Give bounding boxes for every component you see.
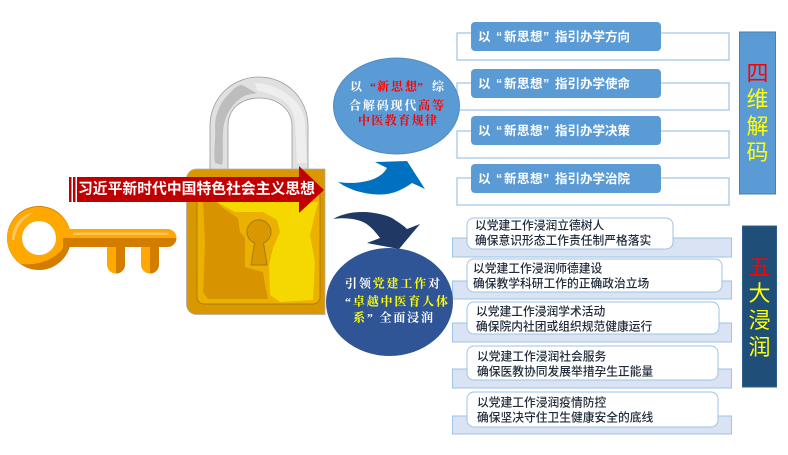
panel: five infusion items: [452, 218, 732, 434]
item: 办学方向: [457, 22, 729, 60]
item: 师德建设: 以党建工作浸润师德建设: [473, 262, 602, 276]
item: 办学治院: 以“新思想”指引办学治院: [478, 171, 630, 186]
item: 师德建设: [452, 259, 732, 299]
lower ellipse text line 1: 引领党建工作对: [345, 276, 440, 290]
item: 立德树人: 确保意识形态工作责任制严格落实: [475, 234, 651, 248]
arrow: navy swoosh down: [333, 212, 420, 249]
item: 办学治院: [457, 164, 729, 205]
lower ellipse text line 3: 系” 全面浸润: [353, 310, 433, 324]
panel: 五大浸润 side label: 浸: [748, 308, 771, 333]
panel: 五大浸润 side label: 润: [748, 335, 771, 360]
item: 立德树人: 以党建工作浸润立德树人: [475, 218, 604, 232]
lower ellipse text line 2: “卓越中医育人体: [345, 294, 448, 308]
item: 学术活动: [452, 302, 732, 342]
item: 办学使命: [457, 69, 729, 110]
arrow: red banner with title: [69, 166, 324, 213]
panel: 五大浸润 side label: 大: [748, 281, 771, 306]
panel: 四维解码 side label: 维: [746, 87, 769, 112]
item: 疫情防控: [452, 392, 732, 434]
padlock shackle: [210, 77, 308, 172]
padlock keyhole: [247, 220, 271, 265]
item: 师德建设: 确保教学科研工作的正确政治立场: [473, 276, 649, 290]
panel: 五大浸润 side label: [742, 226, 776, 387]
icon: padlock: [186, 77, 325, 315]
item: 立德树人: [452, 218, 732, 257]
item: 疫情防控: 确保坚决守住卫生健康安全的底线: [477, 410, 653, 424]
arrow: blue swoosh up: [338, 161, 425, 195]
panel: upper ellipse: [334, 58, 460, 154]
item: 办学方向: 以“新思想”指引办学方向: [478, 29, 630, 44]
item: 办学决策: 以“新思想”指引办学决策: [478, 123, 630, 138]
item: 社会服务: 以党建工作浸润社会服务: [477, 350, 606, 364]
icon: golden key: [7, 206, 176, 274]
item: 疫情防控: 以党建工作浸润疫情防控: [477, 396, 606, 410]
ellipse text line 2: 合解码现代高等: [349, 98, 444, 112]
padlock body: [186, 169, 325, 315]
panel: four guidance items: [457, 22, 729, 205]
panel: 五大浸润 side label: 五: [748, 255, 771, 280]
panel: 四维解码 side label: 四: [746, 61, 769, 86]
panel: 四维解码 side label: [740, 32, 776, 194]
item: 办学使命: 以“新思想”指引办学使命: [478, 76, 630, 91]
item: 办学决策: [457, 116, 729, 158]
item: 学术活动: 以党建工作浸润学术活动: [476, 304, 605, 318]
panel: 四维解码 side label: 解: [746, 114, 769, 139]
item: 社会服务: 确保医教协同发展举措孕生正能量: [477, 364, 653, 378]
panel: 四维解码 side label: 码: [746, 140, 769, 165]
ellipse text line 1: 以 “新思想” 综: [350, 78, 445, 94]
panel: lower ellipse: [326, 248, 453, 356]
item: 社会服务: [452, 346, 732, 388]
banner text: 习近平新时代中国特色社会主义思想: [78, 180, 315, 198]
item: 学术活动: 确保院内社团或组织规范健康运行: [476, 320, 652, 334]
ellipse text line 3: 中医教育规律: [358, 112, 437, 128]
